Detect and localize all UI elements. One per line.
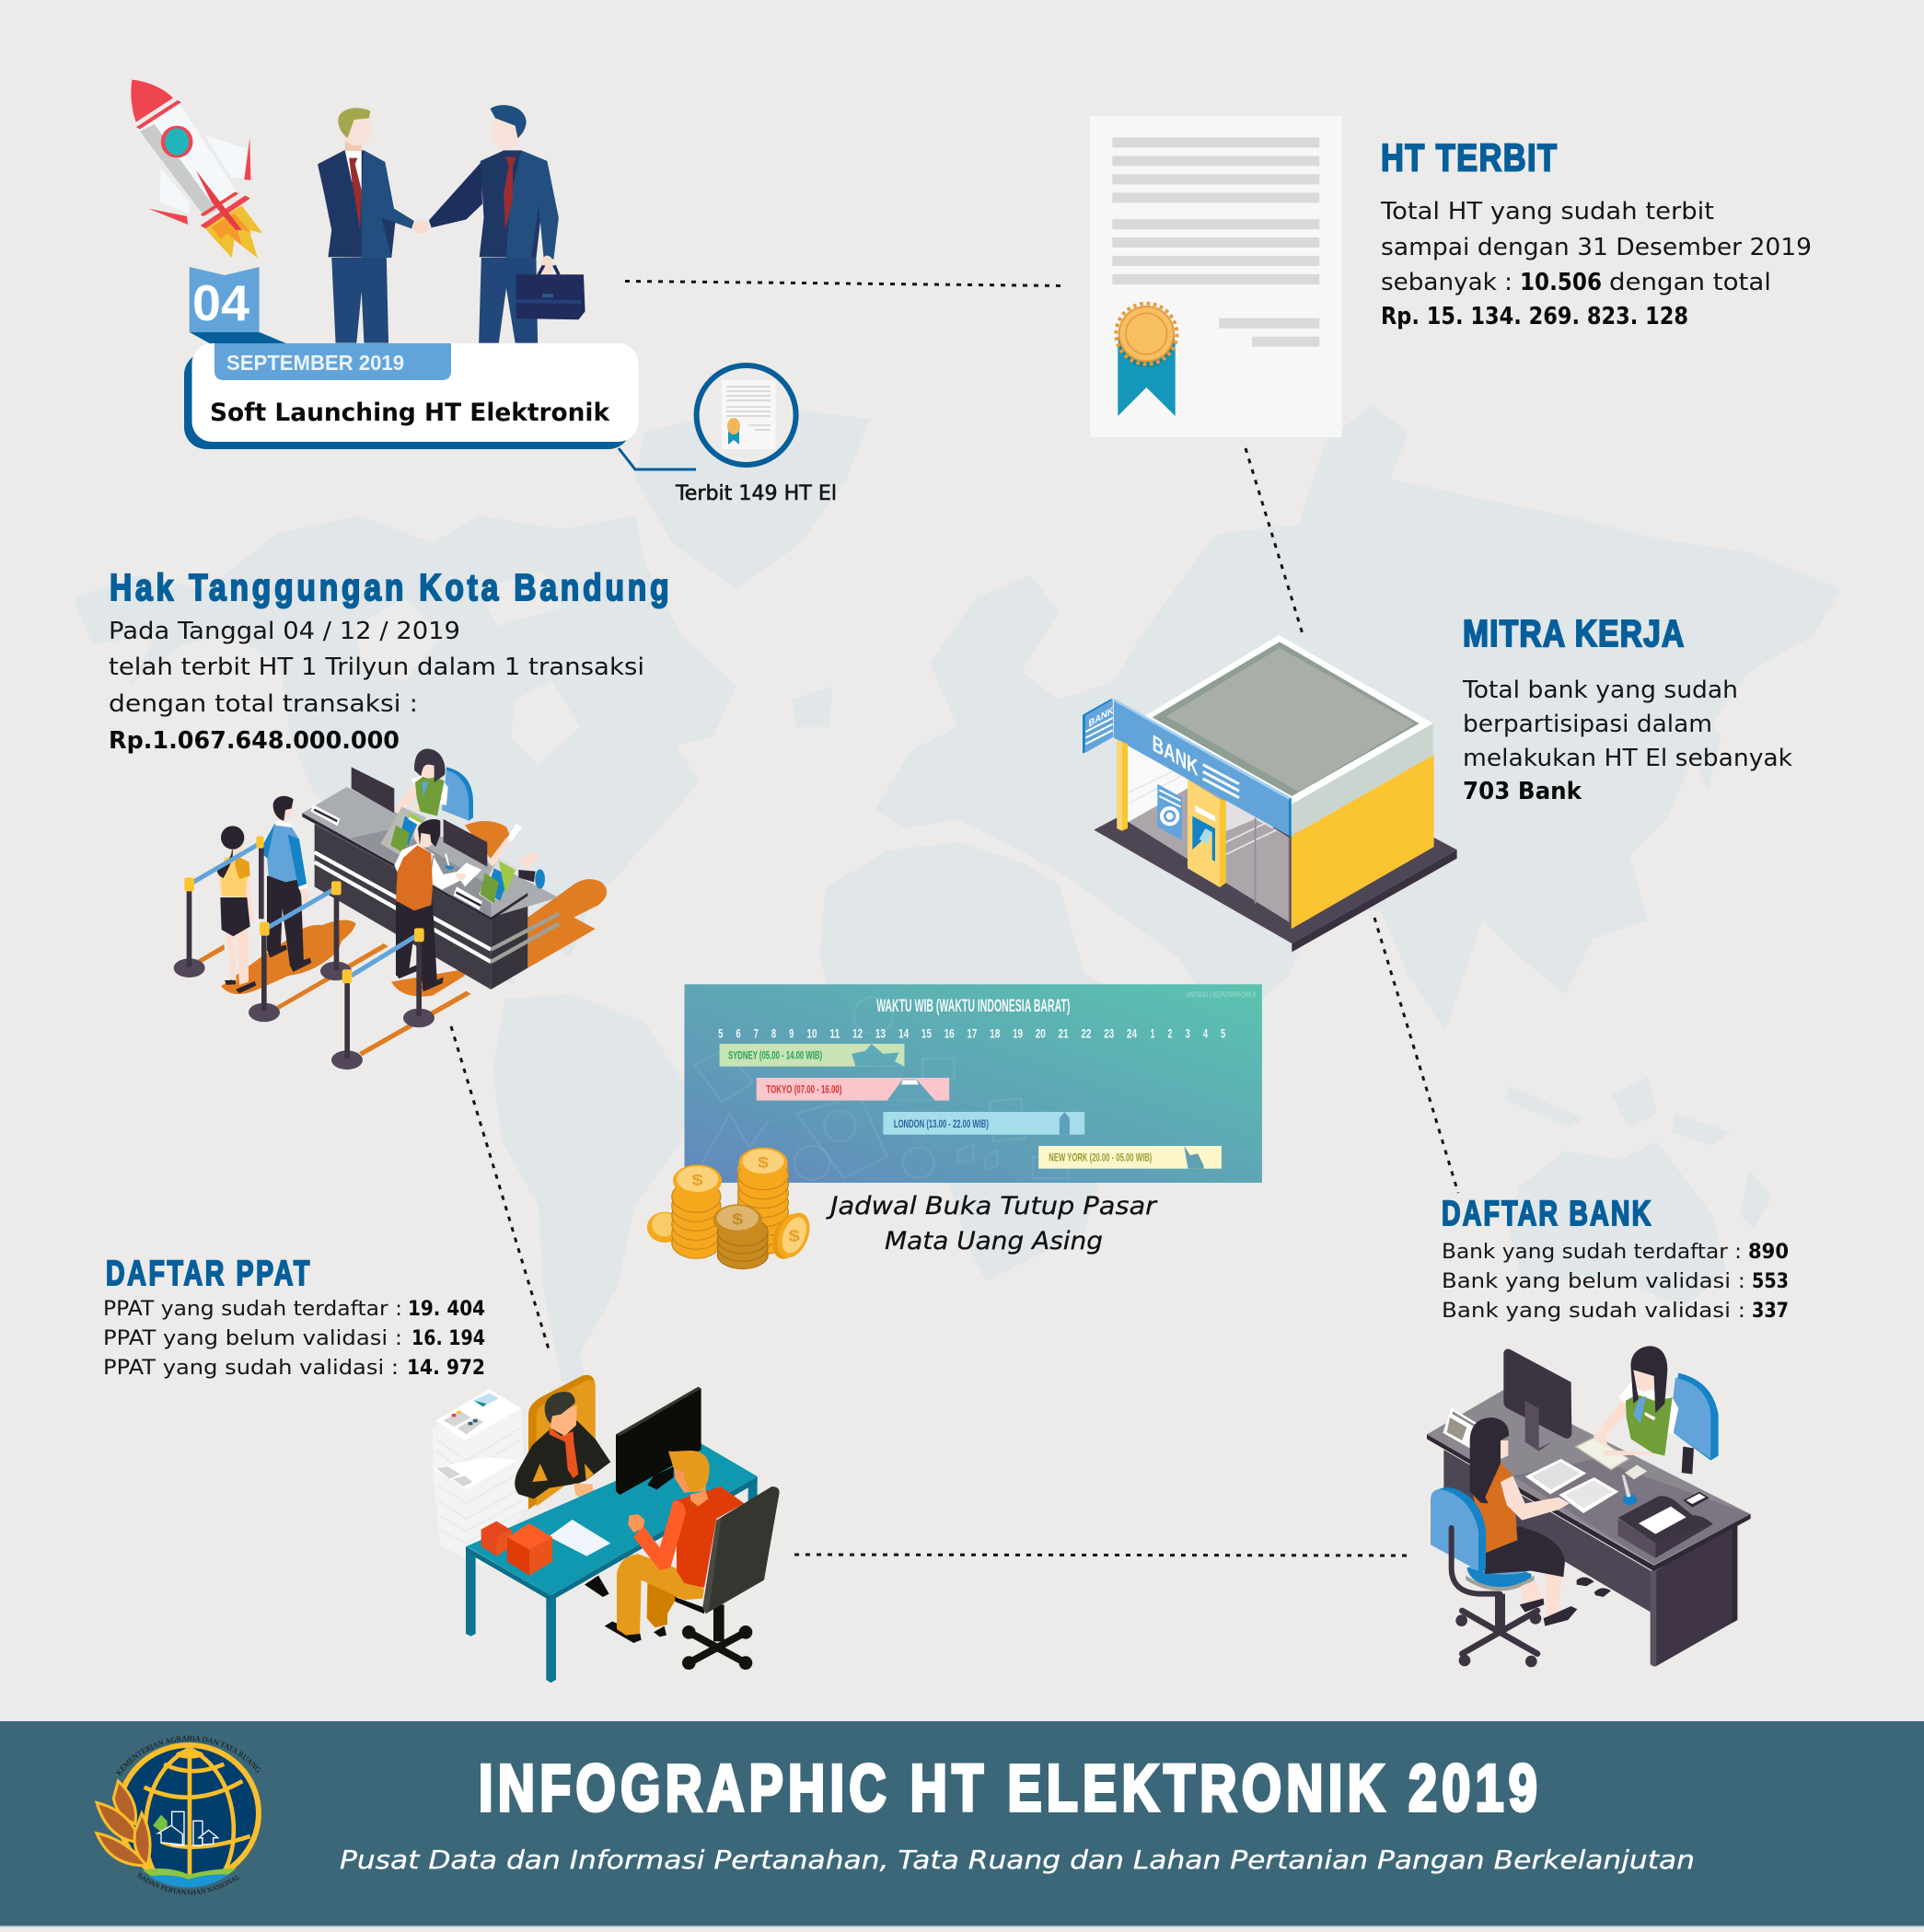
heading: MITRA KERJA: MITRA KERJA <box>1463 612 1684 654</box>
coin stack front right <box>713 1204 768 1269</box>
text: PPAT list: 14. 972 <box>407 1357 485 1380</box>
text: Hak Tanggungan body: dengan total transaksi : <box>109 690 418 718</box>
text: HT terbit body: dengan total <box>1609 269 1771 296</box>
chair back panel <box>537 1380 596 1507</box>
hours axis: 9 <box>789 1026 794 1041</box>
coin stack front left <box>672 1164 722 1258</box>
hours axis: 16 <box>945 1026 955 1041</box>
customer <box>1466 1417 1577 1626</box>
text: PPAT list: 16. 194 <box>411 1327 485 1350</box>
floor shadows <box>198 821 607 1056</box>
hours axis: 5 <box>1221 1026 1225 1041</box>
coin stack back: $ <box>758 1154 769 1172</box>
chart credit: UNTANG I SEPUTARFOREX <box>1186 990 1257 1000</box>
ribbon: 04: 04 <box>192 274 249 331</box>
clerk <box>396 748 545 889</box>
logo <box>94 1736 261 1894</box>
text: HT terbit body: sampai dengan 31 Desember 2019 <box>1381 234 1812 261</box>
dotted connector: PPAT to bank desk <box>794 1555 1413 1556</box>
icon: right businessman with briefcase <box>429 105 585 343</box>
bar: London <box>883 1112 1084 1135</box>
hanging sign <box>1083 699 1114 754</box>
footer banner <box>0 1721 1924 1927</box>
text: bank list: Bank yang sudah terdaftar : <box>1442 1241 1742 1264</box>
coin stack front left: $ <box>692 1173 703 1189</box>
icon: bank building <box>1083 635 1457 952</box>
bar: Tokyo <box>757 1078 949 1101</box>
chart: forex market hours <box>647 984 1262 1269</box>
card front <box>191 343 639 442</box>
hours axis: 21 <box>1059 1026 1069 1041</box>
text: mitra kerja body: Total bank yang sudah <box>1462 677 1738 704</box>
card back <box>184 353 631 449</box>
orange chair back <box>528 1375 596 1510</box>
text: bank list <box>1442 1241 1789 1323</box>
dotted connector: bank to daftar bank <box>1374 918 1458 1193</box>
hours axis: 24 <box>1127 1026 1137 1041</box>
hours axis: 11 <box>829 1026 840 1041</box>
text: mitra kerja body: melakukan HT El sebanyak <box>1463 745 1792 772</box>
text: PPAT list <box>103 1298 485 1380</box>
text: Hak Tanggungan body: telah terbit HT 1 Trilyun dalam 1 transaksi <box>109 654 644 681</box>
bar: Tokyo: TOKYO (07.00 - 16.00) <box>766 1083 841 1095</box>
milestone card: September 2019 <box>184 267 639 449</box>
heading: DAFTAR BANK: DAFTAR BANK <box>1442 1195 1651 1233</box>
icon: left businessman <box>318 108 429 343</box>
caption: market schedule: Jadwal Buka Tutup Pasar <box>826 1192 1158 1221</box>
icon: coins <box>647 1148 815 1269</box>
text: HT terbit body: sebanyak : <box>1381 269 1513 296</box>
coin stack back <box>737 1148 788 1255</box>
caption: market schedule: Mata Uang Asing <box>885 1227 1103 1255</box>
footer title: INFOGRAPHIC HT ELEKTRONIK 2019 <box>479 1752 1537 1825</box>
hours axis: 7 <box>754 1026 759 1041</box>
dotted connector: certificate to bank <box>1246 448 1304 637</box>
text: mitra kerja body: berpartisipasi dalam <box>1463 711 1712 738</box>
hours axis: 17 <box>967 1026 978 1041</box>
queue posts and belts <box>174 836 435 1070</box>
hours axis: 2 <box>1167 1026 1173 1041</box>
hours axis: 5 <box>718 1026 723 1041</box>
hours axis <box>718 1026 1225 1041</box>
text: bank list: Bank yang belum validasi : <box>1442 1270 1745 1293</box>
date tab <box>214 343 451 380</box>
icon: rocket <box>131 80 262 259</box>
rocket and handshake illustration <box>131 80 585 343</box>
hours axis: 4 <box>1203 1026 1208 1041</box>
hanging sign: BANK <box>1089 704 1114 730</box>
monitors <box>352 767 487 867</box>
text: HT terbit body: Rp. 15. 134. 269. 823. 128 <box>1381 303 1688 330</box>
hours axis: 10 <box>806 1026 817 1041</box>
text: PPAT list: PPAT yang sudah validasi : <box>103 1357 399 1380</box>
hours axis: 19 <box>1013 1026 1023 1041</box>
hours axis: 13 <box>875 1026 886 1041</box>
office chair <box>675 1487 780 1670</box>
printer tray <box>1618 1496 1713 1558</box>
text: HT terbit body: 10.506 <box>1520 269 1602 296</box>
single coin <box>767 1210 815 1262</box>
man in orange on chair <box>605 1451 744 1643</box>
label: Terbit 149 HT El: Terbit 149 HT El <box>675 482 837 505</box>
caption: market schedule <box>826 1192 1158 1255</box>
customer man <box>260 794 311 972</box>
customer at counter <box>394 819 467 991</box>
text: Hak Tanggungan body <box>109 618 644 755</box>
document holder <box>1443 1407 1478 1448</box>
hours axis: 3 <box>1186 1026 1190 1041</box>
hours axis: 1 <box>1151 1026 1155 1041</box>
text: HT terbit body: Total HT yang sudah terbit <box>1380 198 1714 226</box>
bar: New York <box>1038 1146 1222 1169</box>
dotted connector: launch to HT terbit <box>625 282 1065 285</box>
keyboard, papers <box>1525 1437 1710 1513</box>
single coin: $ <box>789 1228 800 1245</box>
hours axis: 6 <box>736 1026 741 1041</box>
illustration: bank service desk <box>1427 1346 1751 1667</box>
hours axis: 15 <box>921 1026 932 1041</box>
desk <box>302 787 559 989</box>
text: mitra kerja body: 703 Bank <box>1463 778 1582 805</box>
bar: London: LONDON (13.00 - 22.00 WIB) <box>894 1118 989 1130</box>
footer subtitle: Pusat Data dan Informasi Pertanahan, Tata Ruang dan Lahan Pertanian Pangan Berkelanjutan <box>340 1845 1695 1875</box>
date label: SEPTEMBER 2019 <box>226 351 404 375</box>
heading: HT TERBIT: HT TERBIT <box>1381 136 1558 179</box>
hours axis: 18 <box>990 1026 1000 1041</box>
text: PPAT list: PPAT yang belum validasi : <box>103 1327 402 1350</box>
hours axis: 12 <box>852 1026 863 1041</box>
text: PPAT list: PPAT yang sudah terdaftar : <box>103 1298 402 1321</box>
hours axis: 23 <box>1104 1026 1114 1041</box>
heading: DAFTAR PPAT: DAFTAR PPAT <box>106 1255 310 1293</box>
hours axis: 14 <box>898 1026 909 1041</box>
ribbon: 04 <box>190 267 293 346</box>
world map background <box>74 405 1841 1394</box>
bar: New York: NEW YORK (20.00 - 05.00 WIB) <box>1049 1151 1152 1163</box>
text: Hak Tanggungan body: Rp.1.067.648.000.000 <box>109 727 400 755</box>
illustration: PPAT office desk <box>433 1375 780 1683</box>
ATM <box>1188 780 1226 887</box>
milestone title: Soft Launching HT Elektronik <box>210 399 610 427</box>
paper stack <box>433 1389 527 1568</box>
hours axis: 8 <box>771 1026 776 1041</box>
text: mitra kerja body <box>1462 677 1792 805</box>
dotted connector: reception to PPAT <box>451 1026 550 1352</box>
text: PPAT list: 19. 404 <box>408 1298 485 1321</box>
coin stack front right: $ <box>732 1211 744 1228</box>
text: bank list: Bank yang sudah validasi : <box>1442 1300 1745 1323</box>
bar: Sydney: SYDNEY (05.00 - 14.00 WIB) <box>728 1049 822 1061</box>
monitor <box>1503 1349 1571 1452</box>
logo: BADAN PERTANAHAN NASIONAL <box>136 1872 240 1894</box>
bar: Sydney <box>720 1044 904 1067</box>
monitor <box>616 1387 701 1495</box>
icon: certificate in circle <box>697 365 796 465</box>
text: Hak Tanggungan body: Pada Tanggal 04 / 12 / 2019 <box>109 618 460 645</box>
chart: forex market hours: WAKTU WIB (WAKTU INDONESIA BARAT) <box>876 996 1070 1015</box>
desk <box>1427 1390 1751 1667</box>
seated man in black <box>515 1392 610 1510</box>
hours axis: 20 <box>1036 1026 1046 1041</box>
text: bank list: 553 <box>1752 1270 1789 1293</box>
text: HT terbit body <box>1380 198 1812 330</box>
teal desk <box>466 1443 758 1683</box>
text: bank list: 890 <box>1748 1241 1789 1264</box>
illustration: bank reception queue <box>174 748 607 1070</box>
connector to seal <box>619 448 696 469</box>
heading: Hak Tanggungan Kota Bandung: Hak Tanggungan Kota Bandung <box>110 566 669 608</box>
poster <box>1157 784 1182 840</box>
icon: certificate document <box>1090 116 1342 437</box>
fascia text: BANK <box>1153 731 1199 781</box>
logo: KEMENTERIAN AGRARIA DAN TATA RUANG <box>116 1736 261 1776</box>
teller <box>1594 1346 1719 1475</box>
hours axis: 22 <box>1081 1026 1091 1041</box>
book racks <box>380 807 518 904</box>
text: bank list: 337 <box>1752 1300 1789 1323</box>
customer chair <box>1431 1487 1541 1667</box>
customer woman <box>217 826 256 993</box>
